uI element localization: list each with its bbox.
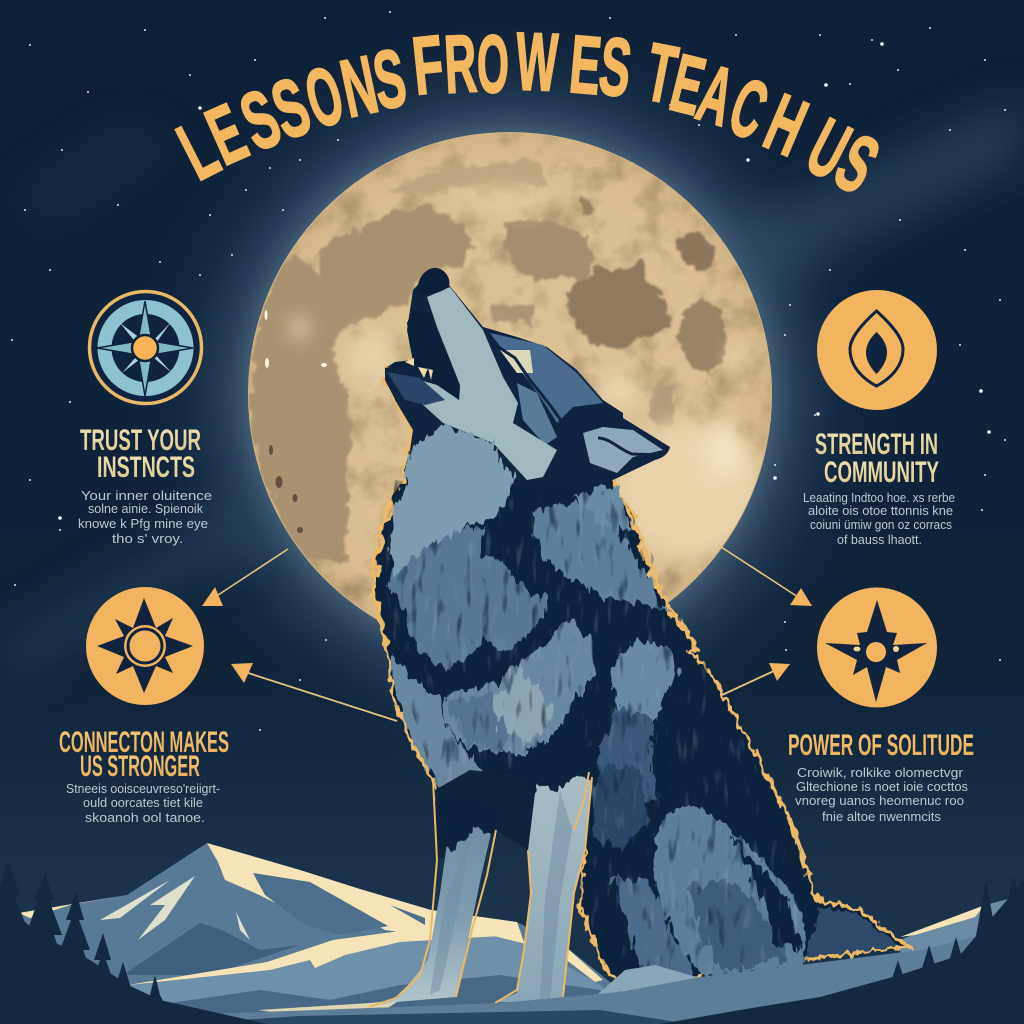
title: S bbox=[367, 33, 412, 128]
wolf head blue mass bbox=[490, 333, 603, 423]
wolf hind dark detail bbox=[690, 880, 790, 970]
heading: COMMUNITY bbox=[824, 456, 939, 489]
wolf gold rim hairs bbox=[373, 500, 910, 948]
wolf leg shading bbox=[430, 790, 572, 1000]
title: F bbox=[408, 19, 448, 113]
body copy: Your inner oluitence bbox=[81, 489, 212, 503]
body copy: fnie altoe nwenmcits bbox=[822, 810, 941, 824]
wolf teeth bbox=[405, 358, 433, 380]
wolf tail bbox=[805, 907, 900, 958]
moon soft mottling bbox=[248, 132, 772, 656]
title: E bbox=[194, 87, 260, 183]
wolf haunch bbox=[653, 803, 806, 977]
icon: compass bbox=[90, 292, 202, 404]
arrow: to solitude icon bbox=[718, 545, 812, 606]
body copy: knowe k Pfg mine eye bbox=[78, 517, 208, 531]
heading bbox=[80, 424, 201, 484]
title: T bbox=[639, 27, 684, 122]
wolf right front leg bbox=[497, 765, 592, 1002]
body copy: aloite ois otoe ttonnis kne bbox=[808, 504, 953, 518]
wolf open mouth bbox=[387, 310, 460, 400]
title: N bbox=[334, 39, 385, 136]
wolf body silhouette with golden rim bbox=[372, 362, 910, 990]
icon: four point star bbox=[817, 588, 937, 708]
heading bbox=[59, 726, 229, 783]
moon bbox=[248, 132, 772, 656]
body copy: Croiwik, rolkike olomectvgr bbox=[797, 766, 963, 780]
body copy: coiuni ümiw gon oz corracs bbox=[810, 518, 952, 532]
wolf ear swoop bbox=[598, 438, 660, 455]
title: C bbox=[719, 60, 779, 157]
title: L bbox=[165, 103, 232, 198]
wolf haunch shadow streak bbox=[730, 835, 800, 950]
distant mountain bbox=[18, 843, 620, 1024]
chest bbox=[443, 617, 597, 753]
foreground ground bbox=[0, 925, 1024, 1024]
moon maria, dark patches bbox=[249, 156, 728, 565]
wolf nose bbox=[418, 268, 449, 294]
title: E bbox=[662, 36, 713, 132]
title: S bbox=[261, 60, 321, 158]
body copy: Gltechione is noet ioie cocttos bbox=[796, 780, 968, 794]
body copy: tho s' vroy. bbox=[112, 532, 183, 546]
right trees bbox=[660, 875, 1024, 1024]
heading: STRENGTH IN bbox=[815, 428, 938, 461]
wolf paw hind bbox=[597, 965, 700, 995]
title: U bbox=[794, 100, 864, 197]
body copy: ould oorcates tiet kile bbox=[83, 796, 203, 810]
text block: strength in community bbox=[803, 428, 955, 547]
title: R bbox=[442, 17, 479, 110]
text block: power of solitude bbox=[788, 729, 974, 824]
heading bbox=[815, 428, 939, 489]
body copy: Stneeis ooisceuvreso'reiigrt- bbox=[66, 782, 220, 796]
stars bbox=[12, 12, 1005, 730]
wolf left front leg bbox=[372, 823, 492, 1006]
body copy: vnoreg uanos heomenuc roo bbox=[795, 794, 964, 808]
title bbox=[165, 15, 893, 212]
body copy bbox=[66, 782, 220, 825]
body copy: skoanoh ool tanoe. bbox=[85, 811, 205, 825]
body copy bbox=[803, 491, 955, 547]
foreground snow hill left bbox=[128, 930, 640, 1024]
icon: leaf eye bbox=[817, 290, 937, 410]
wolf jaw shadow bbox=[387, 372, 445, 405]
wolf cheek fur bbox=[517, 383, 557, 445]
wolf eye line bbox=[497, 346, 575, 440]
heading: US STRONGER bbox=[80, 750, 200, 783]
arrow: to connection icon bbox=[202, 549, 288, 606]
wolf head base bbox=[385, 268, 623, 490]
title: S bbox=[595, 21, 636, 115]
right chest bbox=[610, 640, 680, 727]
heading: INSTNCTS bbox=[97, 451, 195, 484]
wolf ear bbox=[573, 410, 670, 480]
hind fur bbox=[612, 877, 695, 985]
left shoulder bbox=[393, 653, 483, 800]
heading: TRUST YOUR bbox=[80, 424, 201, 457]
icon: sun star bbox=[86, 587, 204, 705]
left foreground trees bbox=[0, 860, 267, 1024]
body copy bbox=[795, 766, 968, 824]
wolf inner ear bbox=[583, 427, 663, 473]
arrow: from chest to connection text bbox=[231, 663, 397, 721]
title: W bbox=[515, 15, 560, 108]
title: E bbox=[566, 19, 605, 113]
text block: trust your instincts bbox=[78, 424, 212, 546]
text block: connection makes us stronger bbox=[59, 726, 229, 825]
wolf muzzle and throat pale fur bbox=[392, 287, 557, 480]
wolf front leg root shadow bbox=[435, 770, 592, 860]
body copy: Leaating Indtoo hoe. xs rerbe bbox=[803, 491, 955, 505]
moon craters bbox=[269, 445, 303, 533]
body copy bbox=[78, 489, 212, 546]
neck fur bbox=[390, 525, 547, 670]
title: S bbox=[229, 72, 293, 169]
title: S bbox=[820, 117, 893, 212]
body copy: of bauss lhaott. bbox=[837, 533, 922, 547]
arrow: from back to solitude text bbox=[722, 663, 790, 695]
wolf leg top fur shadow bbox=[442, 748, 600, 852]
right distant ridge bbox=[900, 895, 1024, 960]
moon bright regions bbox=[291, 190, 765, 560]
wolf bbox=[369, 268, 910, 1007]
wolf eye patch bbox=[500, 350, 533, 373]
title: H bbox=[753, 78, 819, 175]
title: A bbox=[688, 47, 744, 143]
wolf leg gold outlines bbox=[369, 772, 592, 1007]
title: O bbox=[477, 17, 509, 110]
heading: CONNECTON MAKES bbox=[59, 726, 229, 759]
wolf neck fur strip bbox=[388, 425, 515, 575]
wolf fur masses bbox=[390, 483, 695, 985]
wolf fur texture streaks bbox=[386, 480, 814, 978]
title: O bbox=[296, 48, 353, 145]
body copy: solne ainie. Spienoik bbox=[88, 502, 204, 516]
